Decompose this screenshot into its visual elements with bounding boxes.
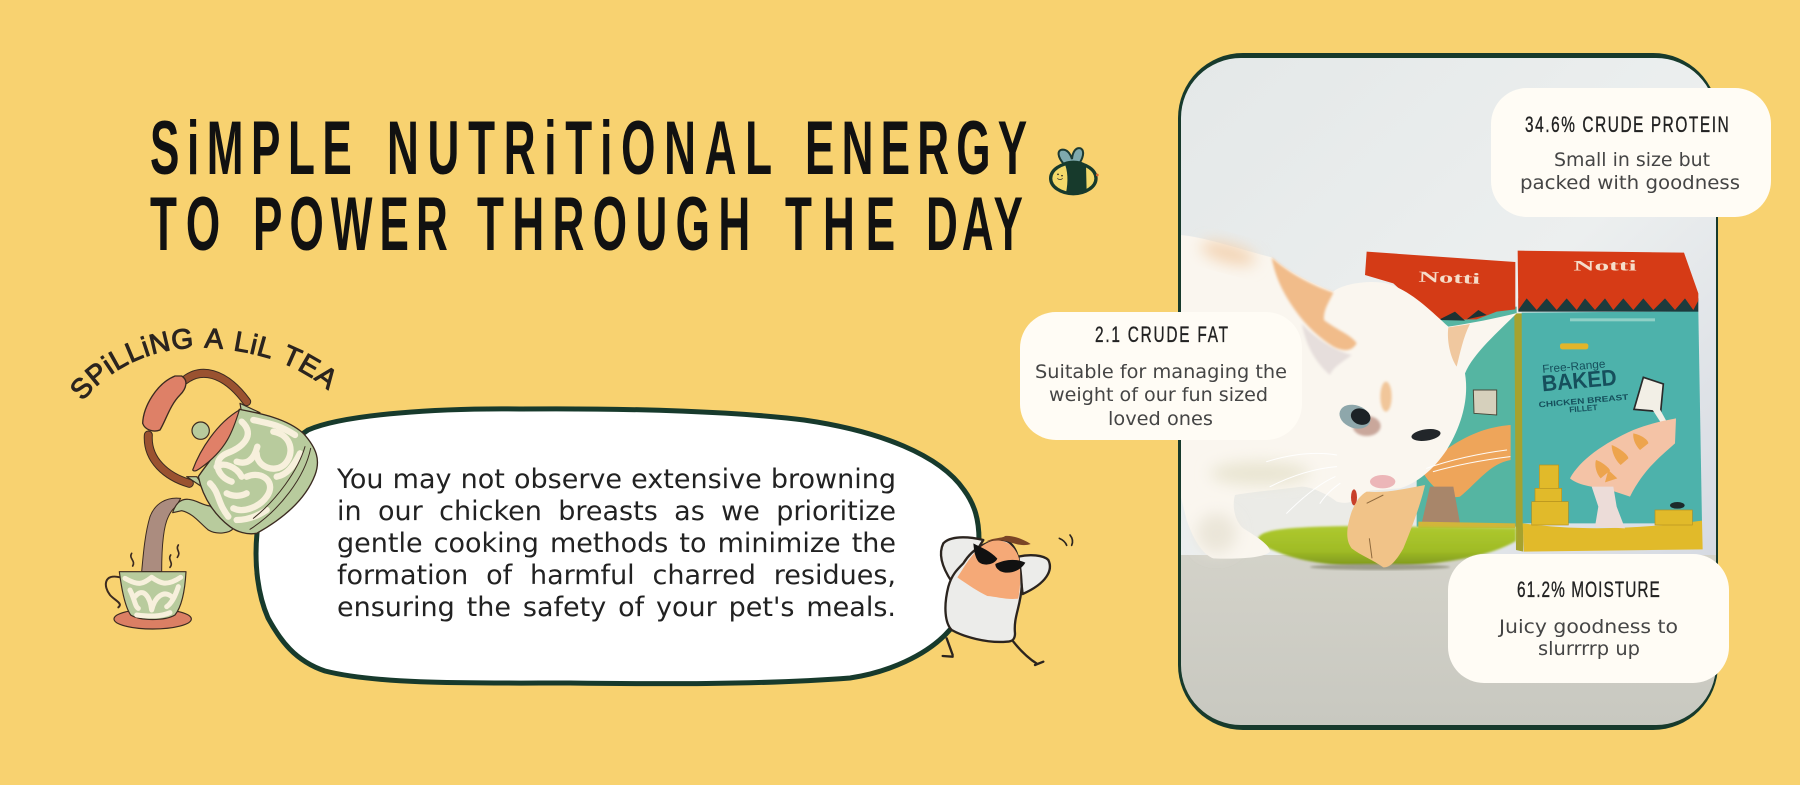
title: DAY	[926, 183, 1023, 267]
box label: CHICKEN BREAST	[1538, 393, 1629, 409]
orange head	[957, 541, 1020, 599]
yellow base	[1523, 521, 1703, 552]
kettle handle	[143, 373, 247, 483]
left product box	[1365, 252, 1517, 528]
card description: slurrrrp up	[1538, 638, 1640, 660]
box label: Free-Range	[1542, 358, 1606, 376]
forehead spot	[1380, 382, 1392, 412]
kettle lugs	[187, 403, 260, 490]
kettle ornament	[210, 420, 300, 520]
left ear	[1272, 257, 1357, 350]
cup ornament	[125, 577, 181, 616]
card description: loved ones	[1108, 408, 1213, 430]
body text: formation of harmful charred residues,	[337, 560, 896, 591]
tea stream	[142, 498, 181, 572]
box cat drawing	[1634, 377, 1663, 412]
title: THROUGH	[477, 183, 750, 267]
curved heading: spilling a lil tea: SPiLLiNG A LiL TEA	[71, 328, 334, 399]
card description	[1035, 361, 1287, 430]
left product box: Notti	[1418, 269, 1482, 288]
body text: ensuring the safety of your pet's meals.	[337, 592, 896, 623]
cup handle	[106, 577, 120, 607]
cup	[119, 572, 186, 619]
tongue	[1351, 489, 1357, 505]
body text: gentle cooking methods to minimize the	[337, 528, 896, 559]
icon: bee	[1051, 148, 1099, 194]
floor	[1181, 555, 1716, 727]
title	[150, 107, 1027, 267]
roof shadow teeth	[1518, 298, 1698, 312]
body	[945, 540, 1022, 642]
motion marks	[1059, 535, 1073, 545]
kettle stripes	[250, 447, 311, 529]
box label	[1539, 362, 1628, 412]
box label: FILLET	[1569, 403, 1598, 414]
small pup drawing	[1592, 487, 1625, 528]
cat body and head	[1180, 235, 1517, 559]
kettle knob	[192, 422, 209, 439]
teapot illustration	[71, 328, 334, 630]
kettle lid	[193, 410, 239, 471]
chicken fillet drawing	[1570, 418, 1676, 497]
chicken treat	[1347, 485, 1425, 567]
box brand: Notti	[1573, 259, 1637, 275]
sunglasses	[973, 543, 1025, 573]
roof	[1518, 251, 1698, 310]
mascot: chicken with sunglasses	[941, 535, 1073, 665]
title: NUTRiTiONAL	[387, 107, 772, 191]
card description: Small in size but	[1554, 149, 1710, 171]
side flap	[1514, 313, 1523, 552]
title: THE	[785, 183, 895, 267]
speech bubble	[256, 409, 979, 684]
legs	[943, 638, 1043, 665]
right product box	[1514, 251, 1703, 552]
card heading: 61.2% MOISTURE	[1517, 578, 1660, 603]
kettle spout	[173, 499, 233, 533]
body text: in our chicken breasts as we prioritize	[337, 496, 896, 527]
title: ENERGY	[805, 107, 1027, 191]
gap under cat	[1210, 480, 1390, 540]
whiskers	[1267, 450, 1510, 513]
wall	[1181, 58, 1716, 558]
front face	[1522, 311, 1702, 523]
back patch	[1199, 237, 1258, 270]
steam	[131, 545, 179, 567]
card: crude fat	[1020, 312, 1302, 440]
inner ear shade	[1302, 323, 1352, 375]
card heading: 2.1 CRUDE FAT	[1095, 323, 1228, 348]
card description: weight of our fun sized	[1049, 384, 1268, 406]
plate	[1258, 526, 1516, 567]
nose	[1370, 475, 1395, 488]
left eye	[1340, 404, 1382, 438]
right ear inner	[1448, 324, 1470, 367]
title: SiMPLE	[150, 107, 352, 191]
plate shadow	[1310, 564, 1450, 570]
right eye	[1412, 429, 1440, 441]
kettle body	[198, 409, 317, 534]
card description: packed with goodness	[1520, 172, 1740, 194]
title: POWER	[253, 183, 448, 267]
arms	[941, 537, 1050, 594]
body text: You may not observe extensive browning	[337, 464, 896, 495]
photo: cat with treat and boxes	[1180, 58, 1716, 727]
saucer	[114, 609, 191, 629]
card description	[1498, 616, 1678, 660]
card: crude protein	[1491, 88, 1771, 217]
panel: photo frame	[1178, 53, 1718, 730]
card description: Juicy goodness to	[1498, 616, 1678, 638]
card heading: 34.6% CRUDE PROTEIN	[1525, 113, 1729, 138]
sand castles	[1532, 465, 1692, 525]
card description	[1520, 149, 1740, 194]
hair tuft	[986, 536, 1031, 545]
body text	[337, 464, 896, 623]
title: TO	[150, 183, 220, 267]
cat	[1180, 235, 1517, 559]
leg shade	[1197, 513, 1237, 553]
body shade	[1210, 462, 1310, 485]
card description: Suitable for managing the	[1035, 361, 1287, 383]
card: moisture	[1448, 554, 1729, 683]
box label: BAKED	[1541, 364, 1618, 396]
